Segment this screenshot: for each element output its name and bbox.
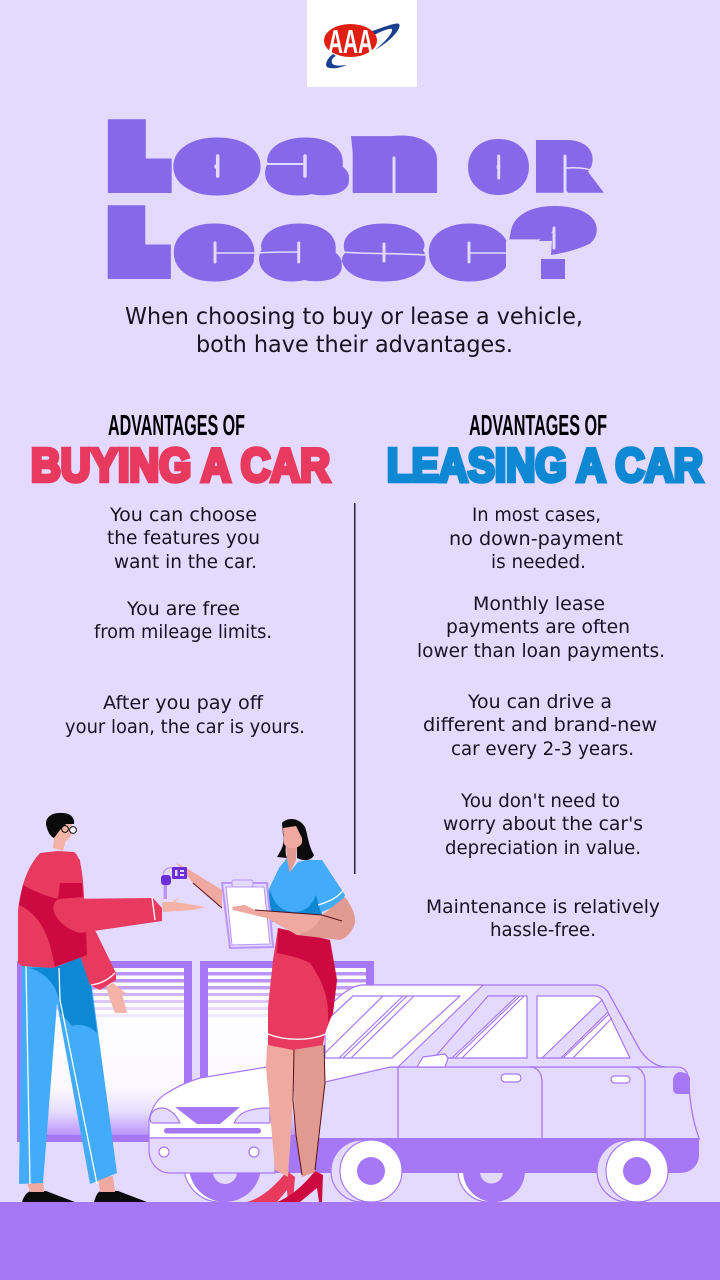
leasing point: new car: different and brand-new	[423, 714, 657, 736]
buying point: ownership: After you pay off	[103, 692, 264, 714]
headlights	[150, 1108, 180, 1123]
question mark trim	[506, 238, 604, 282]
buying point: ownership: your loan, the car is yours.	[65, 716, 305, 738]
leasing point: maintenance: hassle-free.	[490, 919, 596, 941]
near wheels	[331, 1140, 668, 1202]
leasing point: lower payments: Monthly lease	[473, 593, 605, 615]
leasing point: depreciation: worry about the car's	[443, 813, 643, 835]
title: Loan or Lease?: e	[191, 217, 237, 280]
buying point: choose features: the features you	[107, 527, 260, 549]
dress	[268, 928, 337, 1050]
buying advantages list	[65, 504, 305, 738]
title: Loan or Lease?: L	[117, 204, 159, 280]
extended arm	[53, 898, 162, 933]
windshield	[325, 996, 460, 1058]
leasing point: lower payments: lower than loan payments.	[417, 640, 665, 662]
title: Loan or Lease?: ?	[517, 198, 592, 289]
ankles	[26, 1180, 44, 1192]
hair	[277, 819, 314, 860]
heading: advantages of leasing a car: ADVANTAGES OF	[469, 410, 607, 442]
mirror	[417, 1054, 448, 1067]
intro text	[125, 304, 583, 358]
trousers	[19, 950, 117, 1184]
floor	[0, 1202, 720, 1280]
leasing point: maintenance	[426, 896, 660, 941]
heading: advantages of buying a car: ADVANTAGES OF	[108, 410, 245, 442]
windshield frame	[300, 985, 483, 1082]
center divider	[354, 503, 356, 874]
leasing point: new car: car every 2-3 years.	[451, 738, 634, 760]
face	[283, 826, 302, 848]
doors	[398, 1067, 645, 1140]
buying point: mileage: from mileage limits.	[94, 621, 272, 643]
sweater	[18, 851, 87, 968]
heels	[247, 1171, 295, 1202]
intro text: When choosing to buy or lease a vehicle,	[125, 304, 583, 330]
title: Loan or Lease?: s	[360, 216, 408, 280]
heading: advantages of leasing a car	[387, 410, 703, 491]
man	[18, 813, 206, 1202]
leasing point: depreciation: You don't need to	[460, 790, 620, 812]
side windows	[438, 996, 527, 1058]
intro text: both have their advantages.	[196, 332, 513, 358]
hanging arm	[78, 925, 116, 990]
neck	[286, 845, 297, 873]
buying point: mileage	[94, 598, 272, 643]
heading: advantages of buying a car: BUYING A CAR	[31, 439, 330, 491]
leasing point: no down-payment	[449, 504, 623, 573]
leasing point: no down-payment: is needed.	[491, 551, 586, 573]
leasing advantages list	[417, 504, 665, 941]
leasing point: depreciation: depreciation in value.	[445, 837, 641, 859]
title: Loan or Lease?: R	[543, 140, 585, 195]
car	[149, 985, 699, 1210]
showroom windows	[17, 961, 374, 1142]
buying point: mileage: You are free	[126, 598, 240, 620]
keys	[161, 867, 187, 899]
buying point: choose features: You can choose	[109, 504, 257, 526]
right hand	[162, 897, 206, 912]
title: Loan or Lease?: n	[366, 127, 423, 193]
grille	[175, 1107, 240, 1124]
leasing point: lower payments: payments are often	[446, 616, 630, 638]
leasing point: depreciation	[443, 790, 643, 859]
buying point: choose features: want in the car.	[114, 551, 257, 573]
buying point: ownership	[65, 692, 305, 738]
buying point: choose features	[107, 504, 260, 573]
title: Loan or Lease?: L	[117, 118, 160, 194]
logo: AAA	[307, 0, 417, 87]
leasing point: lower payments	[417, 593, 665, 662]
title: Loan or Lease?: a	[276, 216, 323, 280]
front arm	[232, 897, 355, 940]
leasing point: new car: You can drive a	[467, 691, 612, 713]
tail light	[673, 1072, 690, 1094]
clipboard	[222, 880, 273, 948]
title: Loan or Lease?: o	[480, 133, 517, 194]
top	[267, 858, 345, 922]
leasing point: new car	[423, 691, 657, 760]
neck	[53, 838, 66, 851]
far wheels	[180, 1130, 525, 1204]
heading: advantages of buying a car	[31, 410, 330, 491]
title letter slits	[215, 156, 597, 262]
car body	[300, 1067, 699, 1140]
skirt	[275, 1138, 699, 1173]
logo: AAA: AAA	[328, 23, 373, 60]
head	[52, 822, 72, 842]
leasing point: maintenance: Maintenance is relatively	[426, 896, 660, 918]
raised arm	[176, 863, 222, 908]
legs	[266, 1045, 295, 1177]
leasing point: no down-payment: no down-payment	[449, 528, 623, 550]
title: Loan or Lease?: o	[191, 130, 243, 194]
bumper	[149, 1138, 275, 1173]
left hand	[106, 983, 128, 1013]
leasing point: no down-payment: In most cases,	[472, 504, 601, 526]
hood	[149, 1067, 322, 1138]
woman	[161, 819, 355, 1202]
title: Loan or Lease?	[117, 118, 592, 289]
title: Loan or Lease?: a	[282, 130, 330, 194]
title: Loan or Lease?: e	[446, 217, 492, 280]
shoes	[22, 1191, 75, 1202]
